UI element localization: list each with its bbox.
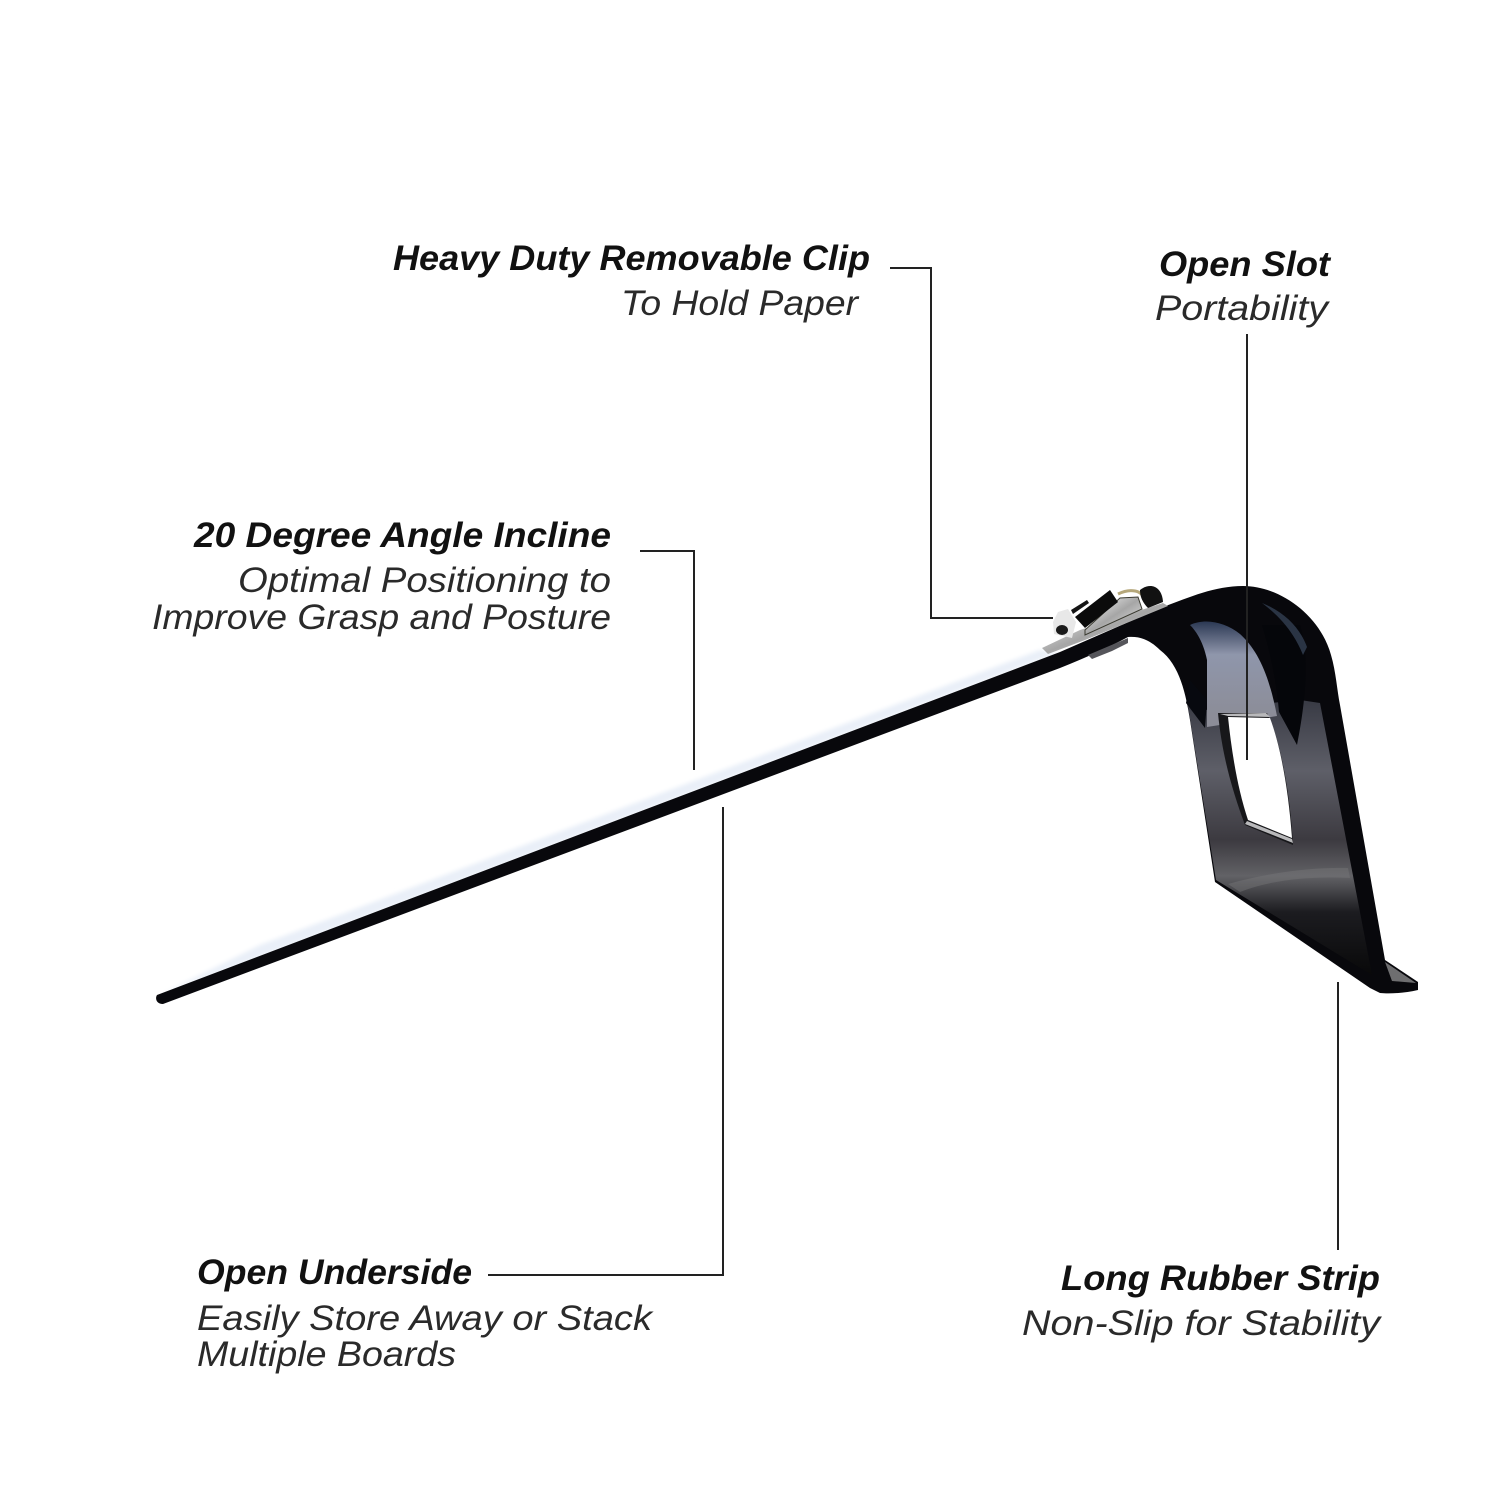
heading: Open Underside xyxy=(197,1253,472,1292)
slot lit edges xyxy=(1220,713,1293,843)
clip chrome lever xyxy=(1085,597,1142,635)
clip rivets under board xyxy=(1088,638,1128,659)
leader: degree incline xyxy=(640,551,694,770)
description line two: Improve Grasp and Posture xyxy=(152,598,611,637)
clip tab shadow xyxy=(1056,625,1068,635)
leader: open slot xyxy=(1246,334,1248,760)
lower sheen xyxy=(1228,868,1350,892)
blue edge reflection xyxy=(1262,603,1307,655)
leader: rubber strip xyxy=(1337,982,1339,1250)
light arch under the curve xyxy=(1190,622,1277,727)
callout: 20 degree angle incline xyxy=(152,516,611,637)
clip base plate xyxy=(1042,603,1168,654)
leader: open underside xyxy=(488,807,723,1275)
board top highlight xyxy=(160,650,1060,995)
description line one: Optimal Positioning to xyxy=(238,561,611,600)
description: Non-Slip for Stability xyxy=(1022,1304,1383,1343)
heading: Heavy Duty Removable Clip xyxy=(393,239,870,278)
clip black grip xyxy=(1075,590,1118,628)
heavy duty clip xyxy=(1042,586,1168,659)
clip front tab xyxy=(1053,609,1076,638)
product: slant board xyxy=(156,586,1418,1004)
description: Portability xyxy=(1155,289,1331,328)
heading: 20 Degree Angle Incline xyxy=(193,516,611,555)
slot opening xyxy=(1228,717,1292,838)
board and stand silhouette xyxy=(156,586,1418,1004)
slot frame xyxy=(1218,713,1293,845)
dark wedge left xyxy=(1186,680,1207,728)
open slot xyxy=(1218,713,1293,845)
clip ring xyxy=(1118,591,1144,600)
description: To Hold Paper xyxy=(621,284,859,323)
leader: removable clip xyxy=(890,268,1053,618)
rubber foot highlight xyxy=(1385,962,1416,983)
heading: Open Slot xyxy=(1159,245,1331,284)
callout: long rubber strip xyxy=(1022,1259,1383,1343)
callout: open slot xyxy=(1155,245,1331,328)
stand inner face xyxy=(1187,700,1372,975)
callout: open underside xyxy=(197,1253,654,1374)
clip small bar xyxy=(1071,600,1089,614)
description line one: Easily Store Away or Stack xyxy=(197,1299,654,1338)
description line two: Multiple Boards xyxy=(197,1335,456,1374)
clip knob xyxy=(1140,586,1163,608)
dark wedge right xyxy=(1262,625,1306,745)
heading: Long Rubber Strip xyxy=(1061,1259,1380,1298)
callout: heavy duty removable clip xyxy=(393,239,870,323)
